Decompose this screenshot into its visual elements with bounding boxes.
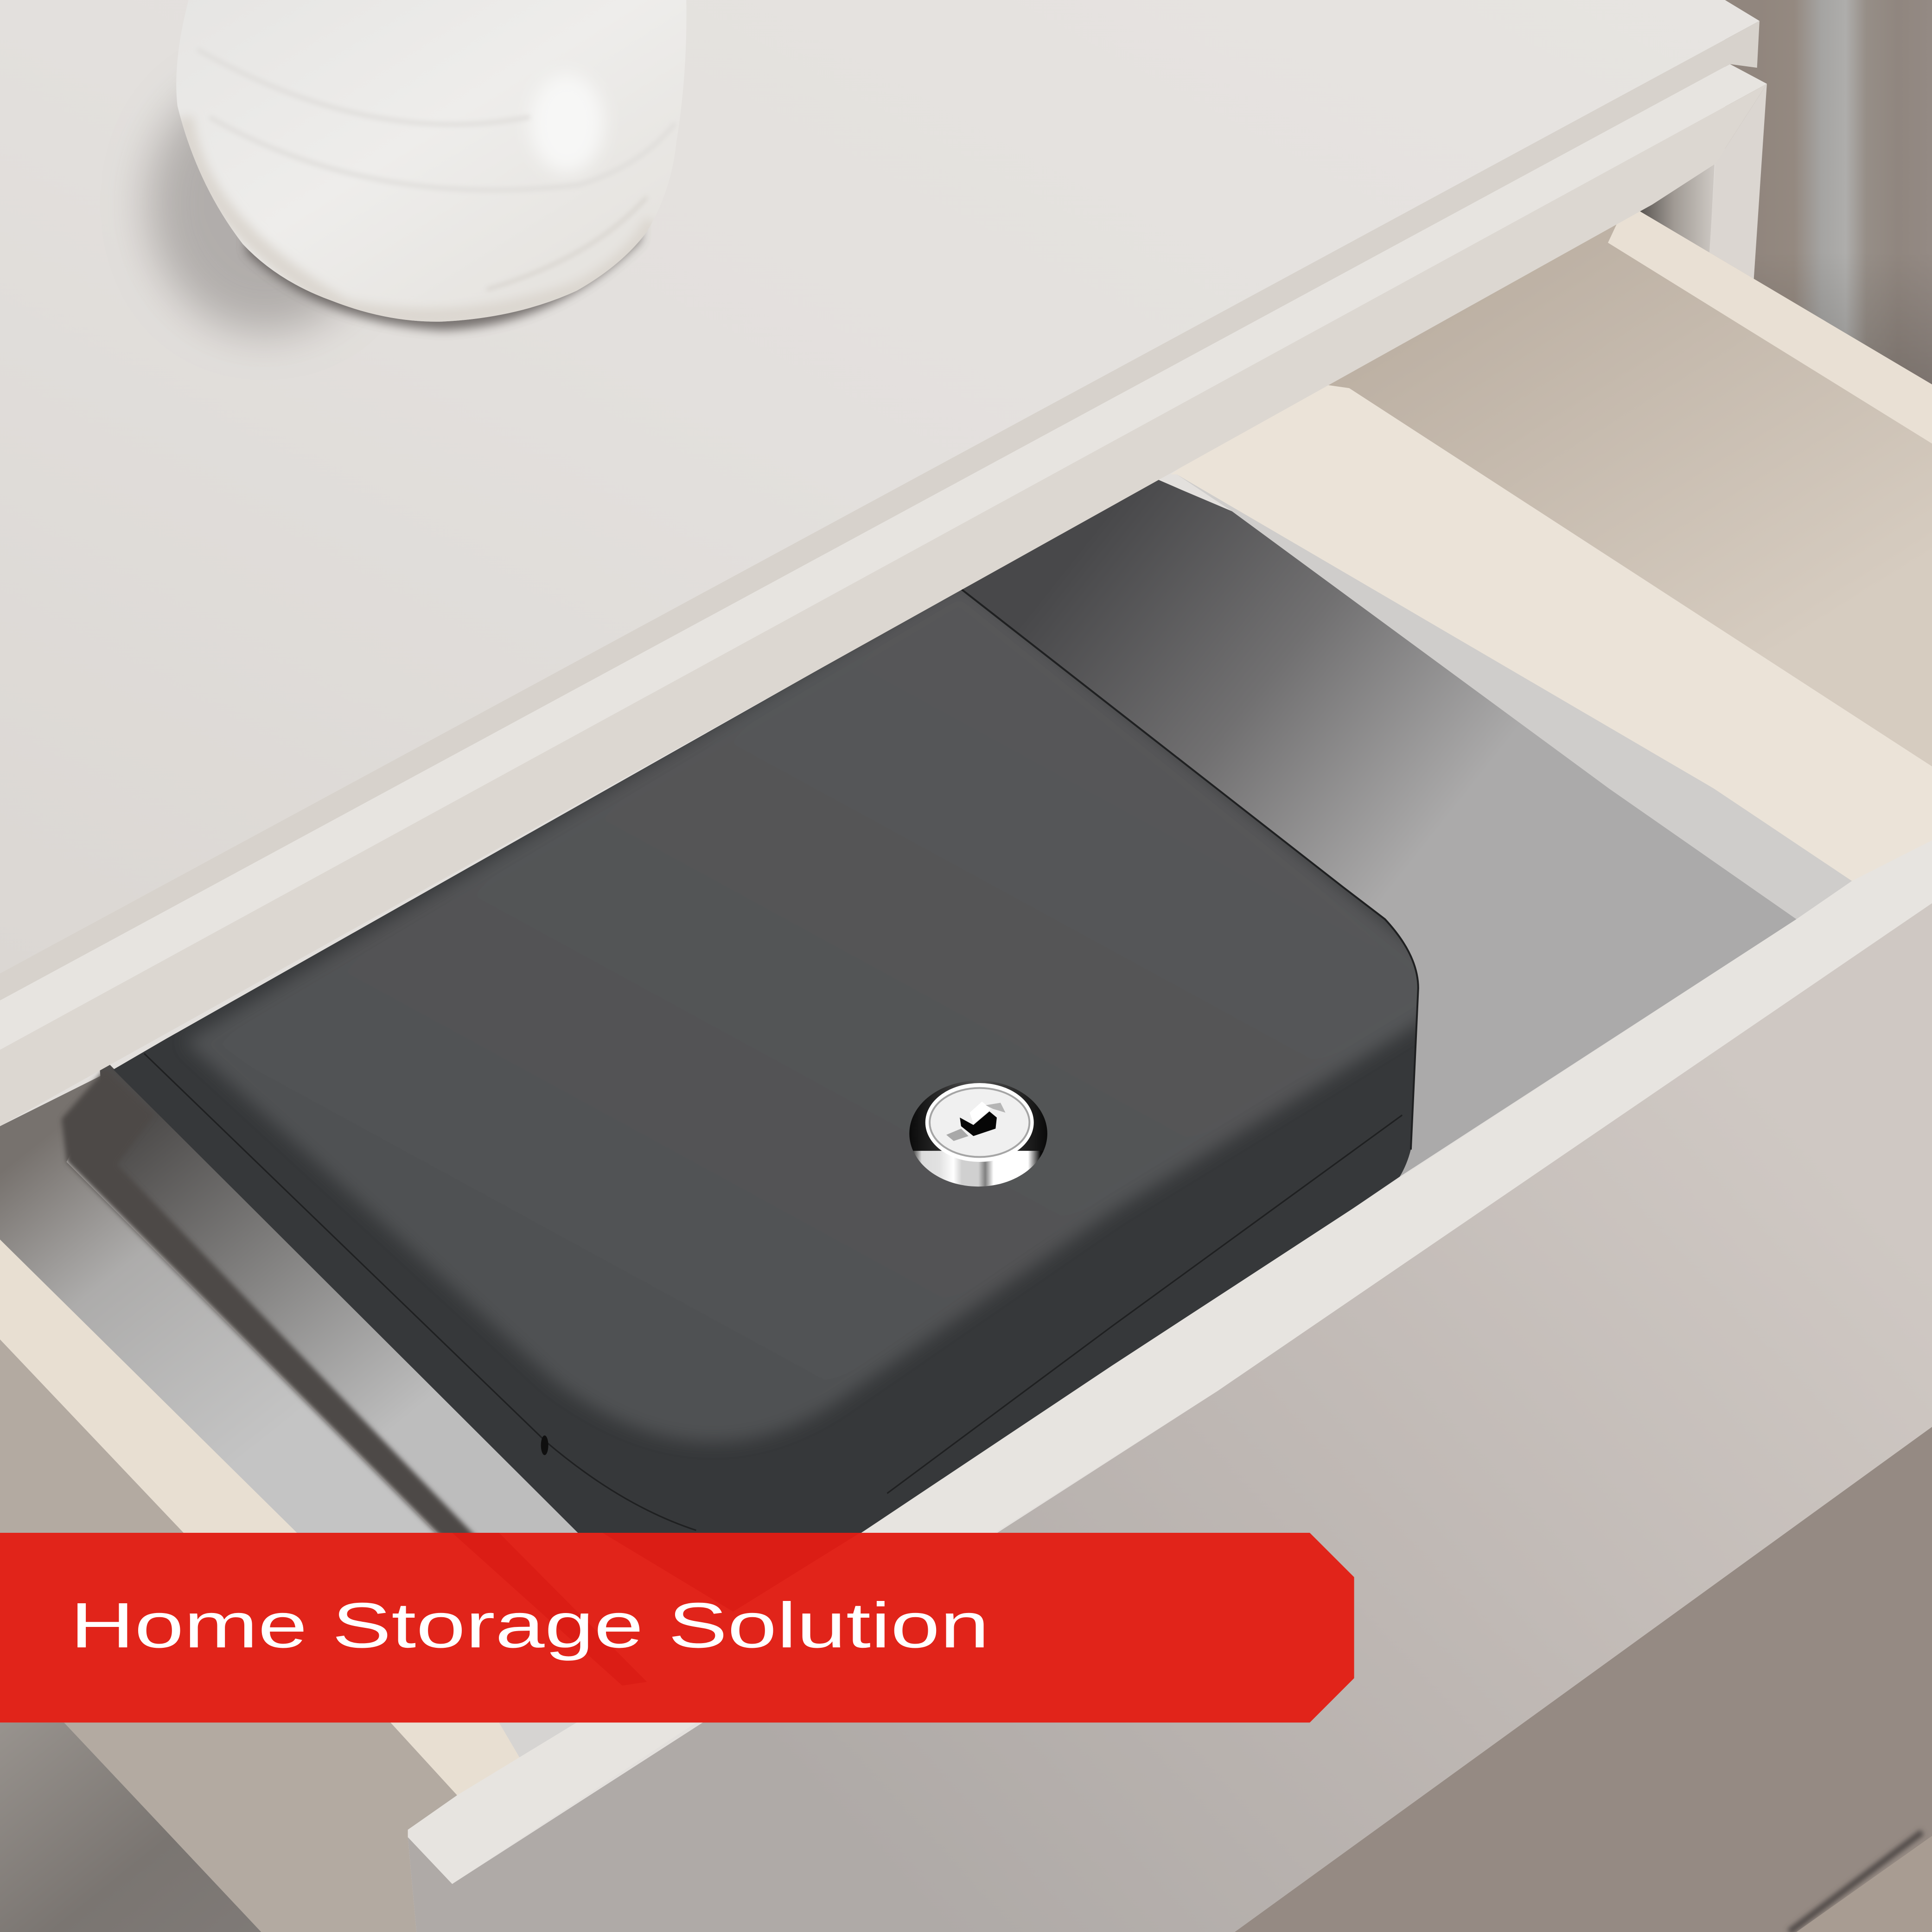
top slab <box>0 0 1760 973</box>
side port <box>541 1435 548 1455</box>
black lock box <box>113 579 1435 1540</box>
left drawer rim <box>0 1239 523 1795</box>
banner see-through shading <box>603 1533 860 1612</box>
icon: key lock <box>909 1081 1047 1186</box>
drawer front <box>408 840 1932 1932</box>
lower lip top <box>0 64 1767 1050</box>
floor corner patch <box>1797 1836 1932 1932</box>
slab front edge <box>0 21 1760 1001</box>
dark lower plate edge <box>62 1070 479 1540</box>
banner <box>0 1533 1354 1722</box>
left floor liner <box>0 1070 444 1540</box>
front panel face <box>408 903 1932 1932</box>
tabletop <box>0 0 1767 1126</box>
front panel rim <box>408 840 1932 1884</box>
vase shadow <box>148 74 641 333</box>
banner shape <box>0 1533 1354 1722</box>
grey drawer liner <box>961 474 1797 1177</box>
right drawer wall <box>1306 203 1932 770</box>
pale liner edge <box>1177 474 1852 919</box>
left drawer wall <box>0 1339 457 1932</box>
lower lip front <box>0 84 1767 1126</box>
wood drawer floor <box>1171 382 1932 881</box>
box lid <box>185 579 1435 1442</box>
grey lower plate top <box>99 1053 585 1540</box>
background curtain <box>1725 0 1932 419</box>
nightstand leg gap <box>1632 154 1715 265</box>
pale liner corner <box>499 1722 579 1765</box>
vase <box>176 0 687 322</box>
left drawer section <box>0 1053 585 1932</box>
floor below drawer <box>1235 1427 1932 1932</box>
dark floor at left <box>0 1722 261 1932</box>
floor corner line <box>1789 1832 1922 1932</box>
drawer interior <box>961 203 1932 1177</box>
box seams <box>144 589 1418 1530</box>
banner title: Home Storage Solution <box>70 1590 989 1661</box>
right drawer rim <box>1608 203 1932 444</box>
nightstand leg <box>1709 84 1767 286</box>
box body <box>113 589 1418 1540</box>
